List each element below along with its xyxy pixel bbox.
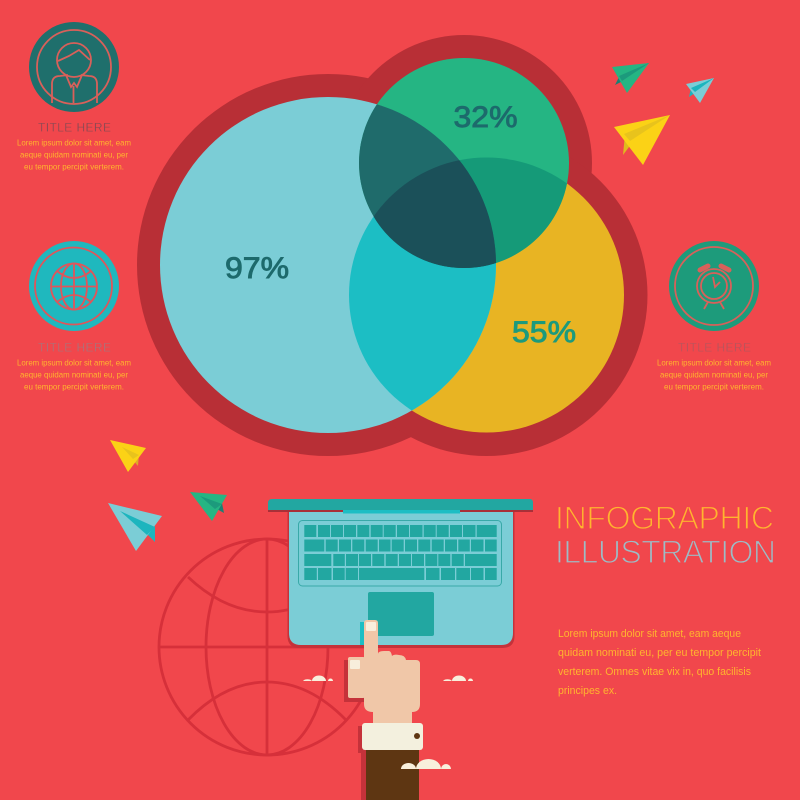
venn diagram [137,35,648,456]
sleeve [366,750,419,800]
body text [558,628,761,697]
body text: quidam nominati eu, per eu tempor percipit [558,647,761,659]
laptop [268,499,533,648]
description: aeque quidam nominati eu, per [20,150,128,160]
body text: verterem. Omnes vitae vix in, quo facilisis [558,666,751,678]
description: eu tempor percipit verterem. [664,382,764,392]
cuff button [414,733,420,739]
description [17,138,131,172]
title: TITLE HERE [678,340,751,354]
description: Lorem ipsum dolor sit amet, eam [657,358,771,368]
keyboard [298,520,502,586]
description: eu tempor percipit verterem. [24,382,124,392]
trackpad [368,592,434,636]
description [657,358,771,392]
laptop shadow [288,510,514,648]
value: 55%: 55% [512,316,576,349]
title line 1: INFOGRAPHIC [555,500,774,536]
cuff [362,723,423,750]
laptop hinge [268,499,533,514]
overlap: green and yellow [374,158,567,268]
title line 2: ILLUSTRATION [555,534,776,570]
icon: person [29,22,119,112]
clouds [303,676,473,769]
description: aeque quidam nominati eu, per [660,370,768,380]
icon: paper plane blue top [686,78,714,103]
wrist [373,708,412,724]
body text: principes ex. [558,685,617,697]
thumb [348,657,365,698]
description [17,358,131,392]
value: 32%: 32% [454,101,518,134]
icon: paper plane blue left [108,503,162,551]
thumb nail [350,660,360,669]
fingers [364,620,420,712]
panel: clock [657,241,771,392]
laptop base [289,508,513,645]
icon: paper plane green left [190,492,227,521]
value: 97%: 97% [225,252,289,285]
cloud right [443,676,473,681]
description: aeque quidam nominati eu, per [20,370,128,380]
icon: large globe [159,539,375,755]
icon: globe [29,241,119,331]
body text: Lorem ipsum dolor sit amet, eam aeque [558,628,741,640]
icon: paper plane yellow left [110,440,146,472]
description: Lorem ipsum dolor sit amet, eam [17,138,131,148]
hand pointing [344,620,423,800]
circle: green 32% [359,58,569,268]
icon: paper plane yellow top [614,115,670,165]
icon: paper plane green top [612,63,649,93]
title: infographic illustration [555,500,776,570]
circle: blue 97% [160,97,496,433]
cloud left [303,676,333,681]
venn outline [137,35,648,456]
icon: alarm clock [669,241,759,331]
description: Lorem ipsum dolor sit amet, eam [17,358,131,368]
title: TITLE HERE [38,120,111,134]
circle: yellow 55% [349,158,624,432]
finger nail [366,622,376,631]
hand shadow [344,622,367,800]
panel: person [17,22,131,172]
panel: globe [17,241,131,392]
description: eu tempor percipit verterem. [24,162,124,172]
cloud bottom [401,759,451,769]
overlap: green and blue [359,104,496,268]
overlap: blue and yellow [349,216,496,410]
title: TITLE HERE [38,340,111,354]
overlap: all three [374,160,496,268]
